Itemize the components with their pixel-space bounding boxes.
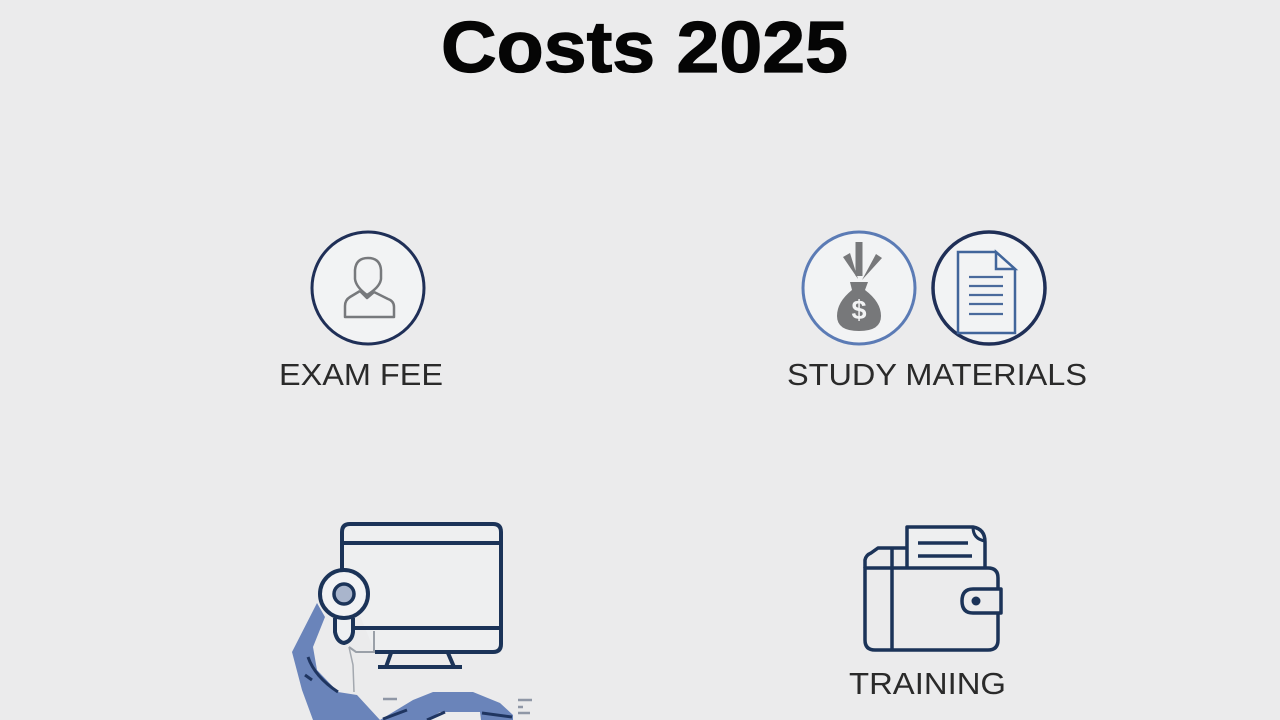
icon: money bag in circle [803, 232, 915, 344]
icon: magnifier [320, 570, 368, 643]
panel: training [849, 527, 1006, 701]
panel: study materials [787, 232, 1087, 392]
panel: monitor illustration [292, 524, 532, 720]
icon: monitor [342, 524, 501, 692]
label: training: TRAINING [849, 666, 1006, 701]
icon: blue arm [292, 603, 532, 720]
label: exam fee: EXAM FEE [279, 357, 443, 392]
title: Costs 2025 [441, 8, 848, 88]
panel: exam fee [279, 232, 443, 392]
icon: person in circle [312, 232, 424, 344]
icon: wallet [865, 527, 1001, 650]
label: study materials: STUDY MATERIALS [787, 357, 1087, 392]
icon: document in circle [933, 232, 1045, 344]
icon: money bag in circle: $ [851, 295, 867, 325]
